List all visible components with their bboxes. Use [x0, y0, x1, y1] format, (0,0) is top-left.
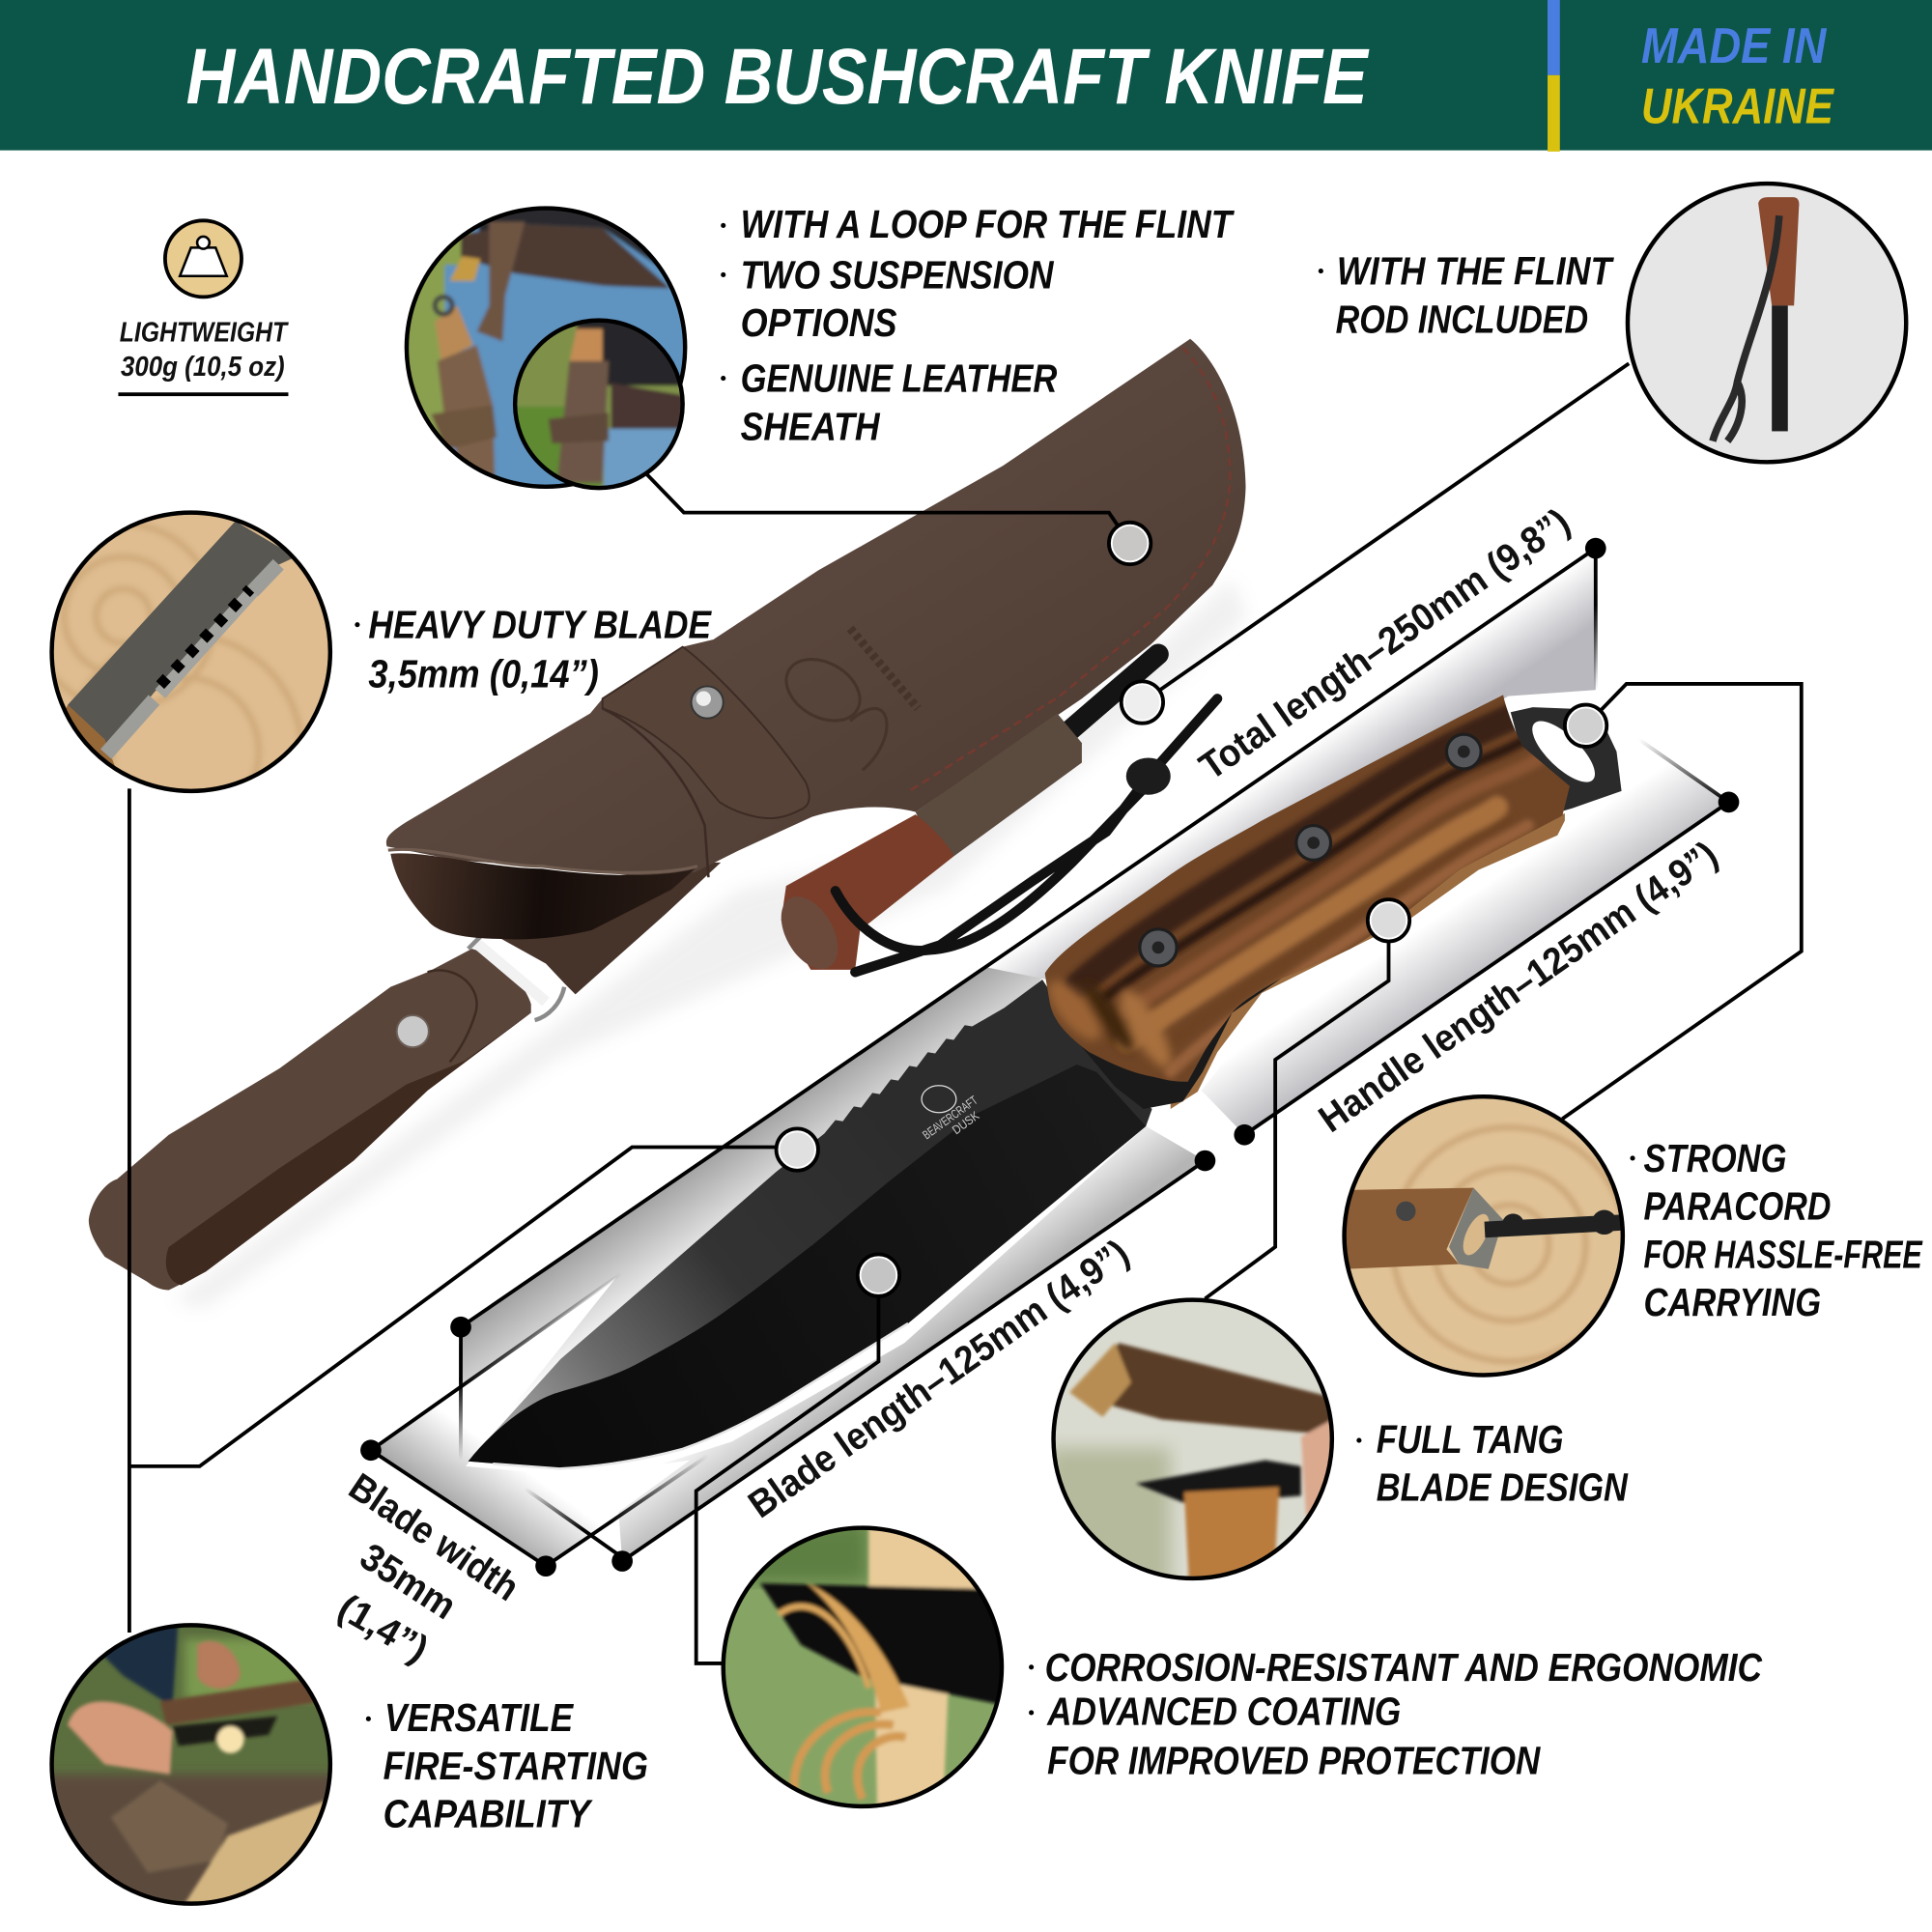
strap rivet	[397, 1015, 429, 1047]
dimension labels: Total length–250mm (9,8”)	[1192, 500, 1577, 788]
dimension lines	[371, 549, 1729, 1566]
text: heavy duty blade: HEAVY DUTY BLADE	[368, 603, 713, 647]
text: heavy duty blade: 3,5mm (0,14”)	[368, 652, 599, 696]
handle bolts	[1140, 734, 1481, 966]
text: fire starting: VERSATILE	[384, 1695, 575, 1740]
text: paracord	[1631, 1136, 1923, 1324]
dimension labels: Blade width	[341, 1465, 526, 1609]
header banner	[0, 0, 1932, 152]
text: sheath features: GENUINE LEATHER	[741, 356, 1058, 401]
blade logo	[920, 1086, 982, 1142]
photo: heavy duty blade	[49, 510, 332, 794]
blade logo: BEAVERCRAFT	[920, 1093, 980, 1142]
rod handle	[781, 814, 953, 970]
dimension labels: Handle length–125mm (4,9”)	[1311, 833, 1725, 1141]
photo: belt carry	[401, 203, 692, 494]
icon: weight	[165, 220, 242, 297]
sheath with strap	[89, 339, 1247, 1309]
text: fire starting: CAPABILITY	[384, 1792, 593, 1836]
black tang line and guard	[1072, 813, 1562, 1109]
stitching	[909, 348, 1230, 791]
inset photo	[515, 318, 685, 491]
text: sheath features: OPTIONS	[741, 300, 897, 345]
text: full tang: BLADE DESIGN	[1377, 1465, 1629, 1510]
sheath mouth	[390, 853, 695, 939]
text: full tang: FULL TANG	[1377, 1417, 1564, 1462]
blade	[469, 980, 1152, 1468]
lower pouch	[501, 863, 721, 994]
strap suede back	[166, 1012, 531, 1285]
text: flint rod: WITH THE FLINT	[1337, 249, 1614, 294]
strap face	[89, 949, 531, 1290]
dimension shading	[371, 549, 1729, 1566]
ferro rod	[1060, 654, 1158, 739]
wood handle	[1045, 696, 1570, 1082]
fire steel	[770, 654, 1217, 979]
flag stripe	[1548, 0, 1560, 152]
dimension labels: Blade length–125mm (4,9”)	[741, 1232, 1137, 1526]
photo: flint rod	[1627, 183, 1907, 464]
title: HANDCRAFTED BUSHCRAFT KNIFE	[186, 33, 1370, 121]
dimension labels: (1,4”)	[330, 1586, 436, 1671]
embossed logo	[776, 629, 918, 770]
text: paracord: PARACORD	[1644, 1184, 1831, 1229]
knife	[469, 678, 1622, 1468]
blade flat grind	[469, 1065, 1146, 1468]
metal tang	[1511, 707, 1622, 813]
text: fire starting	[366, 1695, 648, 1836]
text: sheath features: TWO SUSPENSION	[741, 252, 1055, 297]
sheath body	[386, 339, 1246, 876]
text: paracord: STRONG	[1644, 1136, 1786, 1180]
made in ukraine: MADE IN	[1641, 18, 1827, 74]
rod holder	[916, 714, 1082, 856]
text: paracord: CARRYING	[1644, 1280, 1821, 1324]
photo: paracord	[1337, 1096, 1627, 1378]
text: coating: ADVANCED COATING	[1046, 1690, 1401, 1734]
made in ukraine: UKRAINE	[1641, 79, 1835, 135]
snap rivet	[692, 686, 724, 719]
text: heavy duty blade	[355, 603, 713, 696]
text: coating: CORROSION-RESISTANT AND ERGONOMIC	[1045, 1645, 1762, 1690]
dimension end dots	[360, 538, 1739, 1577]
photo: fire starting	[43, 1614, 339, 1910]
leather flap	[603, 647, 810, 818]
belt strap	[89, 936, 564, 1290]
photo: full tang	[1047, 1293, 1338, 1596]
lightweight text	[120, 317, 289, 383]
text: sheath features: SHEATH	[741, 404, 881, 448]
lightweight badge	[118, 220, 289, 396]
D-ring	[469, 936, 564, 1020]
callout leader lines	[129, 363, 1802, 1663]
text: coating: FOR IMPROVED PROTECTION	[1047, 1739, 1542, 1783]
text: flint rod	[1319, 249, 1614, 341]
lower scale	[1171, 813, 1565, 1109]
blade edge	[493, 1323, 908, 1468]
made in ukraine	[1641, 18, 1835, 135]
lightweight text: 300g (10,5 oz)	[121, 352, 285, 383]
blade logo: DUSK	[950, 1108, 982, 1137]
text: flint rod: ROD INCLUDED	[1336, 297, 1588, 341]
dimension labels: 35mm	[353, 1535, 464, 1628]
paracord	[836, 698, 1217, 972]
text: sheath features: WITH A LOOP FOR THE FLINT	[741, 202, 1235, 246]
text: coating	[1029, 1645, 1762, 1783]
text: sheath features	[721, 202, 1235, 448]
callout marker dots	[777, 523, 1606, 1296]
lightweight text: LIGHTWEIGHT	[120, 317, 289, 348]
text: full tang	[1356, 1417, 1629, 1510]
photo: carving	[715, 1521, 1010, 1817]
dimension labels	[330, 500, 1725, 1671]
text: fire starting: FIRE-STARTING	[384, 1744, 648, 1788]
